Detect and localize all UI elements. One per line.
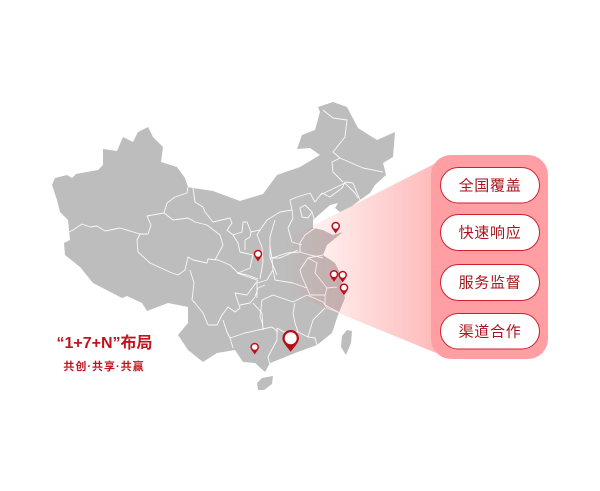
panel: services bbox=[431, 155, 548, 359]
Taiwan island bbox=[341, 330, 352, 355]
service pill: channel cooperation bbox=[440, 314, 540, 349]
spotlight fan from map to panel bbox=[285, 163, 436, 353]
service pill: fast response: 快速响应 bbox=[459, 224, 521, 242]
service pill: nationwide coverage bbox=[440, 168, 540, 203]
service pill: channel cooperation: 渠道合作 bbox=[459, 324, 521, 340]
icon: location pin Jiangsu east bbox=[338, 271, 347, 282]
title: 1+7+N layout: “1+7+N”布局 bbox=[56, 333, 153, 352]
icon: location pin Jiangsu west bbox=[330, 270, 338, 282]
icon: location pin Guangxi bbox=[250, 343, 259, 354]
service pill: nationwide coverage: 全国覆盖 bbox=[459, 176, 521, 194]
icon: location pin Zhejiang bbox=[340, 283, 348, 295]
service pill: fast response bbox=[440, 214, 540, 250]
icon: location pin Shaanxi bbox=[254, 250, 262, 262]
panel background bbox=[431, 155, 548, 359]
province borders bbox=[69, 110, 383, 365]
subtitle: co-create, share, win-win: 共创·共享·共赢 bbox=[63, 359, 145, 373]
service pill: service supervision bbox=[440, 264, 540, 300]
icon: location pin Shandong bbox=[331, 222, 340, 234]
service pill: service supervision: 服务监督 bbox=[459, 274, 521, 292]
icon: large location pin bbox=[282, 330, 299, 352]
Hainan island bbox=[257, 376, 273, 390]
mainland silhouette bbox=[52, 102, 395, 372]
map of China bbox=[52, 102, 395, 390]
